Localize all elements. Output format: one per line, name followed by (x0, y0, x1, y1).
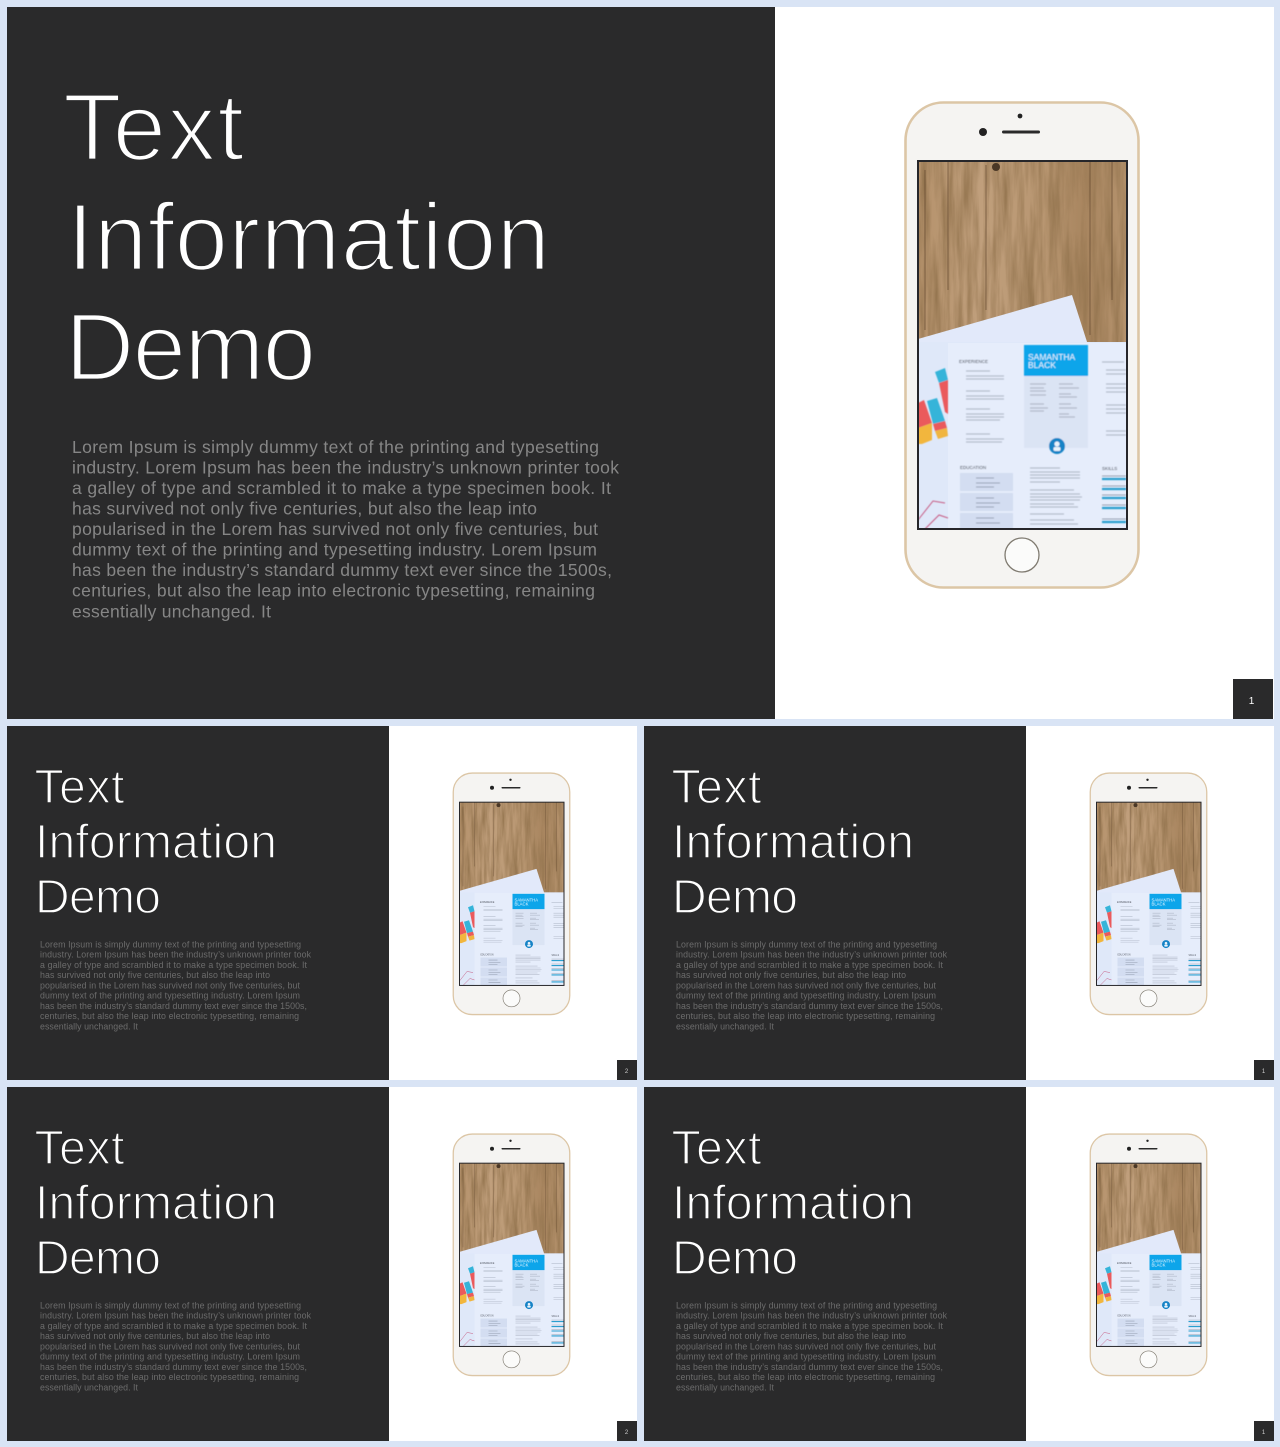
body text: industry. Lorem Ipsum has been the industry’s unknown printer took (676, 950, 948, 960)
body text: essentially unchanged. It (676, 1022, 775, 1032)
title: Text (63, 74, 244, 181)
slide 5: bottom right small slide (644, 1087, 1274, 1441)
body text: industry. Lorem Ipsum has been the industry’s unknown printer took (40, 950, 312, 960)
body text (676, 1300, 948, 1392)
body text: essentially unchanged. It (40, 1022, 139, 1032)
body text: has survived not only five centuries, but also the leap into (72, 498, 537, 518)
body text: centuries, but also the leap into electronic typesetting, remaining (676, 1372, 935, 1382)
panel: dark left side (644, 1087, 1026, 1441)
body text: centuries, but also the leap into electronic typesetting, remaining (40, 1011, 299, 1021)
page number badge (617, 1421, 637, 1441)
body text: a galley of type and scrambled it to make a type specimen book. It (676, 960, 944, 970)
title: Text (672, 1122, 762, 1175)
body text: a galley of type and scrambled it to make a type specimen book. It (676, 1321, 944, 1331)
panel: white right side (644, 726, 1274, 1080)
title: Demo (35, 871, 161, 924)
page number badge: 2 (625, 1430, 629, 1436)
phone mockup (906, 102, 1138, 588)
body text: a galley of type and scrambled it to make a type specimen book. It (72, 478, 611, 498)
page number badge: 1 (1249, 696, 1255, 707)
panel: dark left side (7, 7, 775, 719)
title: Information (35, 1177, 277, 1230)
panel: white right side (7, 726, 637, 1080)
body text: has been the industry’s standard dummy text ever since the 1500s, (72, 560, 612, 580)
body text: has survived not only five centuries, but also the leap into (40, 970, 270, 980)
body text: Lorem Ipsum is simply dummy text of the printing and typesetting (40, 940, 301, 950)
body text: centuries, but also the leap into electronic typesetting, remaining (676, 1011, 935, 1021)
body text: has been the industry’s standard dummy text ever since the 1500s, (676, 1001, 943, 1011)
body text: popularised in the Lorem has survived not only five centuries, but (72, 519, 598, 539)
body text: essentially unchanged. It (40, 1382, 139, 1392)
body text: popularised in the Lorem has survived not only five centuries, but (676, 1342, 937, 1352)
body text: industry. Lorem Ipsum has been the industry’s unknown printer took (40, 1311, 312, 1321)
body text: dummy text of the printing and typesetting industry. Lorem Ipsum (40, 991, 300, 1001)
title (34, 761, 277, 924)
body text: Lorem Ipsum is simply dummy text of the printing and typesetting (676, 940, 937, 950)
body text: a galley of type and scrambled it to make a type specimen book. It (40, 1321, 308, 1331)
page number badge: 1 (1262, 1430, 1266, 1436)
page number badge: 2 (625, 1069, 629, 1075)
body text: Lorem Ipsum is simply dummy text of the printing and typesetting (676, 1300, 937, 1310)
title: Text (672, 761, 762, 814)
title (672, 1122, 914, 1285)
title: Information (67, 184, 550, 291)
body text: has survived not only five centuries, but also the leap into (676, 970, 906, 980)
title: Demo (35, 1232, 161, 1285)
title (63, 74, 550, 401)
panel: dark left side (7, 1087, 389, 1441)
body text: essentially unchanged. It (72, 602, 271, 622)
body text: has been the industry’s standard dummy text ever since the 1500s, (40, 1362, 307, 1372)
panel: white right side (7, 7, 1274, 719)
title: Demo (672, 1232, 798, 1285)
body text: dummy text of the printing and typesetting industry. Lorem Ipsum (40, 1352, 300, 1362)
body text: dummy text of the printing and typesetting industry. Lorem Ipsum (676, 991, 936, 1001)
title: Information (672, 1177, 914, 1230)
body text: popularised in the Lorem has survived not only five centuries, but (40, 980, 301, 990)
body text (72, 437, 619, 622)
body text: popularised in the Lorem has survived not only five centuries, but (40, 1342, 301, 1352)
title: Demo (672, 871, 798, 924)
body text: centuries, but also the leap into electronic typesetting, remaining (72, 580, 595, 600)
body text: centuries, but also the leap into electronic typesetting, remaining (40, 1372, 299, 1382)
panel: white right side (7, 1087, 637, 1441)
title (672, 761, 914, 924)
panel: dark left side (644, 726, 1026, 1080)
body text: has been the industry’s standard dummy text ever since the 1500s, (676, 1362, 943, 1372)
page number badge: 1 (1262, 1069, 1266, 1075)
body text: has survived not only five centuries, but also the leap into (40, 1331, 270, 1341)
phone mockup (1090, 773, 1207, 1015)
body text: dummy text of the printing and typesetting industry. Lorem Ipsum (676, 1352, 936, 1362)
title: Information (672, 816, 914, 869)
page number badge (1254, 1421, 1274, 1441)
panel: white right side (644, 1087, 1274, 1441)
body text: popularised in the Lorem has survived not only five centuries, but (676, 980, 937, 990)
body text (40, 940, 312, 1032)
phone mockup (453, 1134, 570, 1376)
phone mockup (453, 773, 570, 1015)
body text: Lorem Ipsum is simply dummy text of the printing and typesetting (72, 437, 599, 457)
slide 1: large featured slide (7, 7, 1274, 719)
body text: has survived not only five centuries, but also the leap into (676, 1331, 906, 1341)
page number badge (1233, 679, 1273, 719)
body text (676, 940, 948, 1032)
slide 2: top left small slide (7, 726, 637, 1080)
title: Text (34, 1122, 124, 1175)
phone mockup (1090, 1134, 1207, 1376)
body text: Lorem Ipsum is simply dummy text of the printing and typesetting (40, 1300, 301, 1310)
body text: dummy text of the printing and typesetting industry. Lorem Ipsum (72, 540, 597, 560)
body text: industry. Lorem Ipsum has been the industry’s unknown printer took (72, 458, 619, 478)
body text: essentially unchanged. It (676, 1382, 775, 1392)
slide 3: top right small slide (644, 726, 1274, 1080)
title: Demo (65, 294, 316, 401)
body text: industry. Lorem Ipsum has been the industry’s unknown printer took (676, 1311, 948, 1321)
slide 4: bottom left small slide (7, 1087, 637, 1441)
title: Information (35, 816, 277, 869)
title (34, 1122, 277, 1285)
page number badge (617, 1060, 637, 1080)
body text: has been the industry’s standard dummy text ever since the 1500s, (40, 1001, 307, 1011)
body text: a galley of type and scrambled it to make a type specimen book. It (40, 960, 308, 970)
title: Text (34, 761, 124, 814)
page number badge (1254, 1060, 1274, 1080)
panel: dark left side (7, 726, 389, 1080)
body text (40, 1300, 312, 1392)
